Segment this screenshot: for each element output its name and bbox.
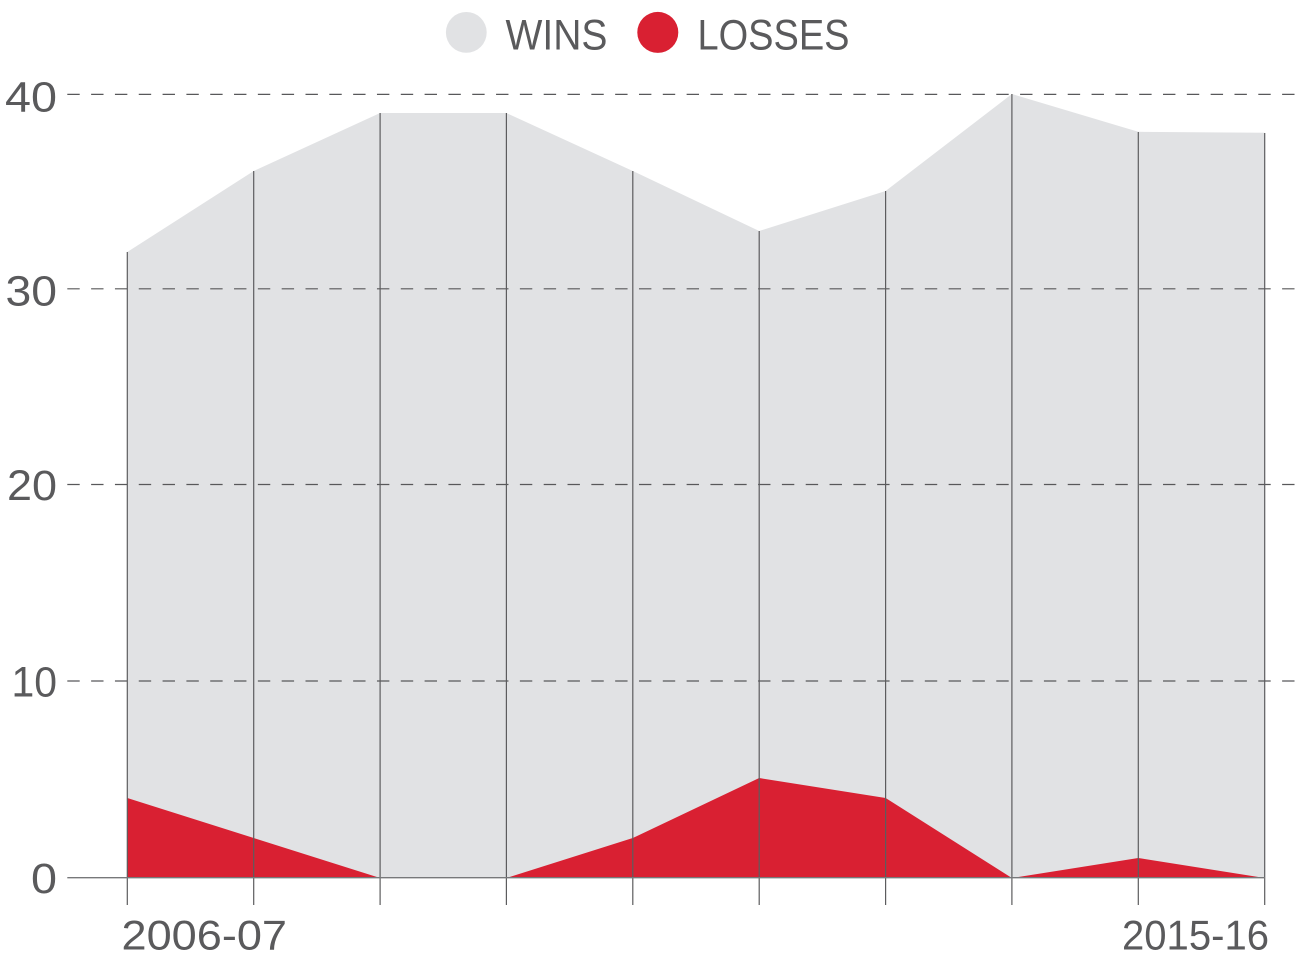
legend marker: wins	[446, 12, 487, 53]
legend marker: losses	[637, 12, 678, 53]
y label 40: 40	[5, 74, 57, 122]
wins area	[127, 94, 1265, 878]
vertical season lines	[127, 94, 1265, 905]
losses area	[127, 778, 1265, 878]
horizontal gridlines	[67, 94, 1296, 681]
y label 0: 0	[31, 856, 57, 903]
y label 30: 30	[6, 268, 57, 316]
y-axis labels	[5, 74, 57, 903]
legend label: losses: LOSSES	[698, 11, 850, 59]
y label 20: 20	[7, 463, 57, 510]
x label last season: 2015-16	[1122, 912, 1269, 958]
x-axis labels	[122, 912, 1269, 958]
baseline	[67, 877, 1265, 879]
x label first season: 2006-07	[122, 912, 287, 958]
legend label: wins: WINS	[506, 11, 608, 59]
legend	[446, 11, 850, 59]
y label 10: 10	[12, 660, 57, 706]
